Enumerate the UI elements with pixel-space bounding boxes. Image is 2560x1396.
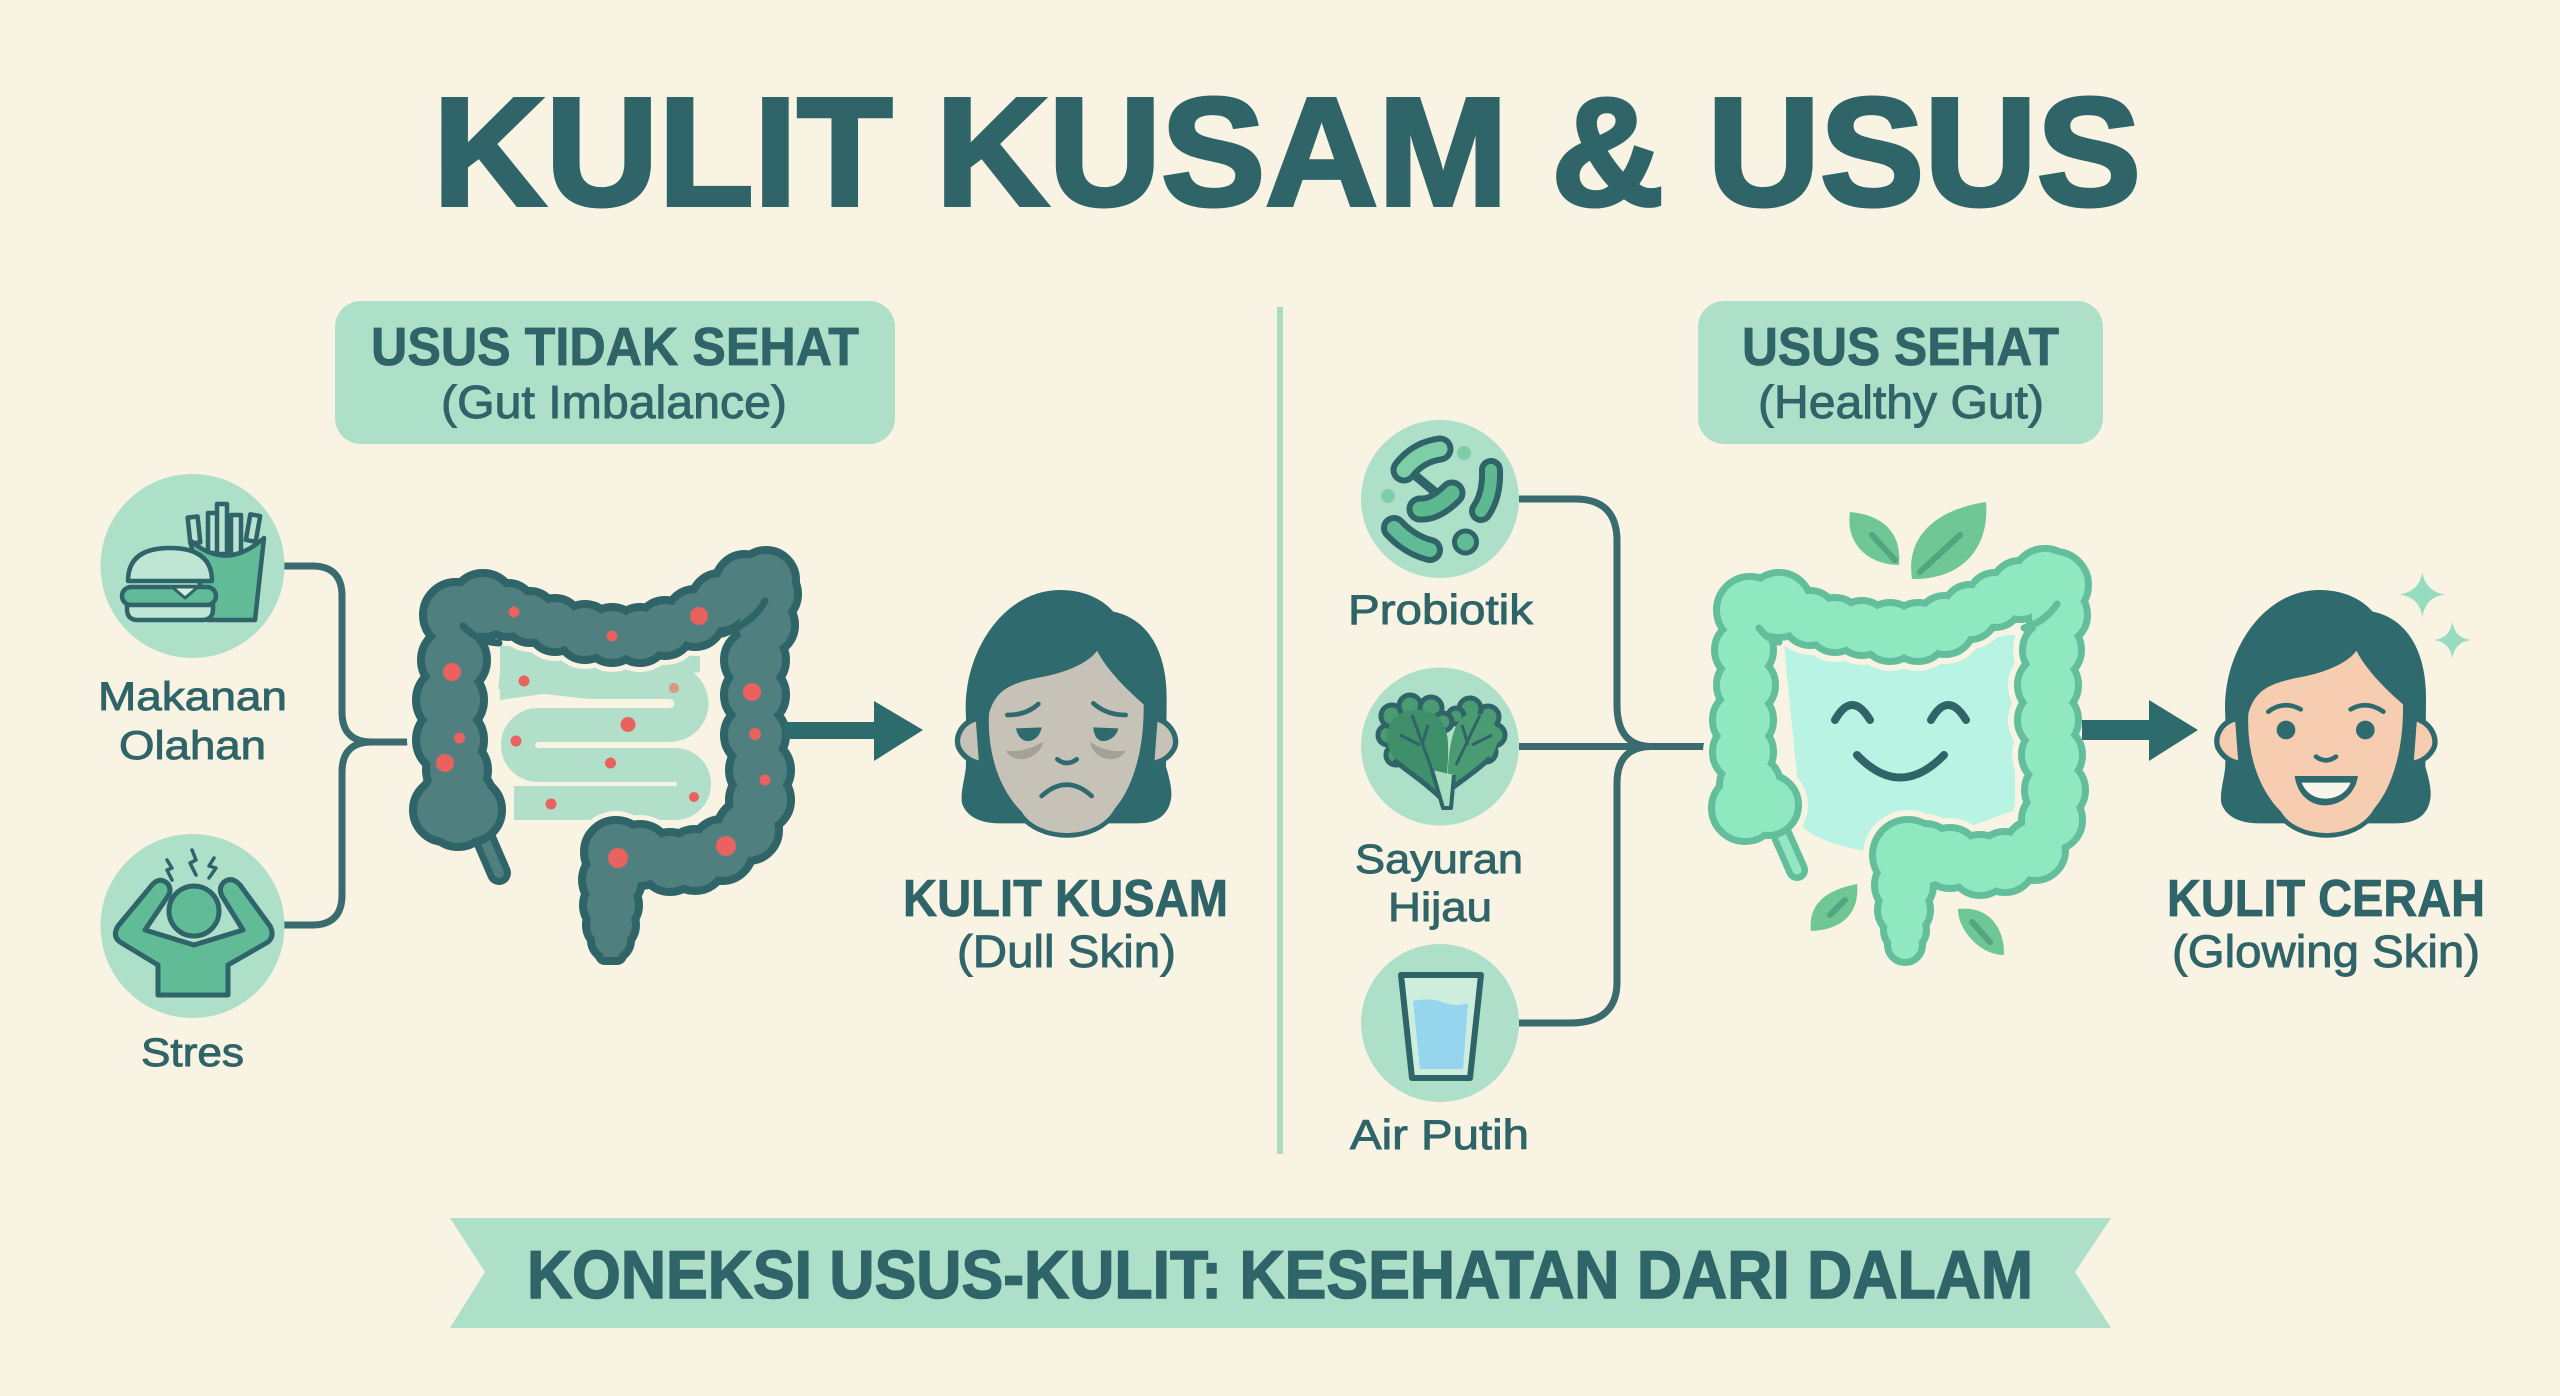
label: sayuran hijau — [1355, 836, 1523, 930]
label: makanan olahan: Makanan — [98, 675, 287, 719]
heading: usus tidak sehat — [335, 301, 895, 444]
bottom ribbon banner — [450, 1218, 2111, 1328]
leaves around healthy gut — [1811, 502, 2004, 955]
label: kulit cerah: KULIT CERAH — [2167, 870, 2485, 928]
heading: usus sehat: (Healthy Gut) — [1758, 376, 2044, 428]
center divider — [1277, 307, 1283, 1154]
heading: usus tidak sehat: (Gut Imbalance) — [441, 376, 787, 428]
icon: burger and fries — [100, 474, 284, 658]
healthy colon — [1717, 554, 2083, 957]
icon: happy glowing face — [2217, 572, 2471, 835]
label: probiotik: Probiotik — [1348, 586, 1534, 633]
icon: sad dull face — [957, 590, 1176, 835]
heading: usus sehat — [1698, 301, 2103, 444]
connector lines: inputs to gut — [1519, 499, 1712, 1023]
icon: glass of water — [1361, 944, 1519, 1102]
heading: usus tidak sehat: USUS TIDAK SEHAT — [371, 317, 859, 377]
label: kulit kusam: (Dull Skin) — [957, 926, 1176, 977]
label: stres: Stres — [141, 1031, 244, 1075]
icon: probiotics — [1361, 420, 1519, 578]
label: kulit kusam — [903, 870, 1228, 977]
arrow: gut to glowing skin — [2082, 700, 2198, 761]
icon: stressed person — [100, 834, 284, 1018]
label: makanan olahan: Olahan — [119, 724, 266, 768]
label: sayuran hijau: Sayuran — [1355, 836, 1523, 882]
panel: unhealthy gut — [98, 301, 1228, 1075]
bottom ribbon banner: KONEKSI USUS-KULIT: KESEHATAN DARI DALAM — [527, 1237, 2033, 1313]
label: air putih: Air Putih — [1350, 1111, 1529, 1158]
unhealthy small intestine — [500, 640, 700, 810]
connector lines: causes to gut — [284, 566, 420, 925]
title: KULIT KUSAM & USUS — [433, 66, 2141, 238]
heading: usus sehat: USUS SEHAT — [1742, 317, 2059, 377]
unhealthy colon with inflamed spots — [419, 556, 792, 955]
icon: leafy greens — [1361, 668, 1519, 826]
healthy belly with smiling face — [1783, 635, 2015, 851]
label: sayuran hijau: Hijau — [1388, 884, 1492, 930]
arrow: gut to dull skin — [784, 701, 923, 761]
panel: healthy gut — [1348, 301, 2485, 1158]
label: kulit cerah: (Glowing Skin) — [2172, 926, 2480, 977]
label: kulit kusam: KULIT KUSAM — [903, 870, 1228, 928]
label: kulit cerah — [2167, 870, 2485, 977]
label: makanan olahan — [98, 675, 287, 768]
